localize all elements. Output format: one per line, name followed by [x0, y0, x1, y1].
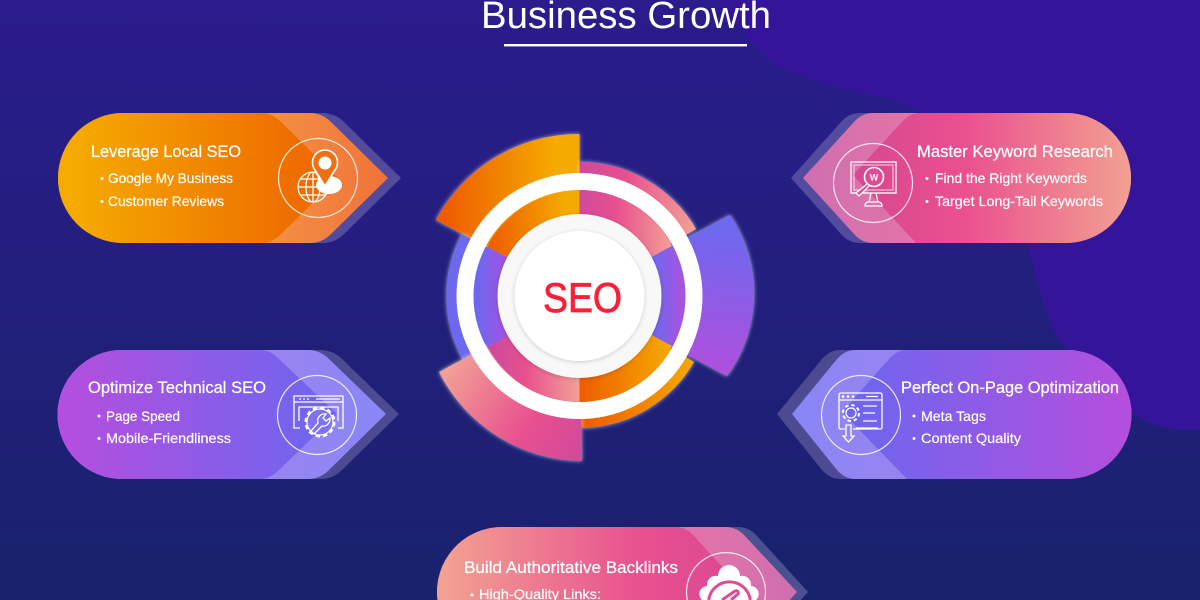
list: Page Speed	[106, 408, 180, 424]
heading: Leverage Local SEO	[91, 143, 241, 161]
inner band segments	[475, 190, 685, 402]
list	[98, 408, 231, 446]
panel: Build Authoritative Backlinks	[437, 527, 808, 600]
panel: Leverage Local SEO	[58, 113, 401, 243]
panel: Optimize Technical SEO	[57, 350, 399, 479]
icon: globe and map pin	[278, 138, 358, 218]
icon: web page with gear and download arrow	[822, 376, 900, 454]
panel: Master Keyword Research	[791, 113, 1131, 243]
icon: monitor with magnifier	[834, 144, 912, 222]
list: Content Quality	[921, 430, 1021, 446]
heading: Perfect On-Page Optimization	[901, 379, 1119, 397]
list: Target Long-Tail Keywords	[935, 193, 1103, 209]
list	[926, 170, 1103, 209]
outer thin pink sector	[580, 162, 696, 296]
outer thin purple sector	[447, 234, 580, 360]
list: Google My Business	[108, 170, 233, 186]
outer pink sector	[439, 296, 582, 461]
central SEO wheel	[436, 134, 754, 461]
list: Mobile-Friendliness	[106, 430, 231, 446]
list	[100, 170, 233, 209]
icon: monitor with magnifier: W	[870, 172, 879, 182]
heading: Build Authoritative Backlinks	[464, 559, 678, 577]
heading: Optimize Technical SEO	[88, 379, 266, 397]
heading: Master Keyword Research	[917, 143, 1113, 161]
list	[912, 408, 1021, 446]
inner light disc	[498, 214, 662, 378]
list: Find the Right Keywords	[935, 170, 1087, 186]
panel: Perfect On-Page Optimization	[777, 350, 1132, 479]
background blob	[716, 0, 1200, 430]
outer purple sector	[580, 215, 754, 376]
icon: cloud with link	[687, 553, 765, 600]
outer orange sector	[436, 134, 580, 296]
outer thin orange sector	[580, 296, 694, 428]
icon: browser with gear and wrench	[278, 376, 356, 454]
SEO label: SEO	[543, 274, 622, 321]
inner white disc	[514, 231, 644, 361]
list: Customer Reviews	[108, 193, 224, 209]
list: Meta Tags	[921, 408, 986, 424]
white ring	[465, 182, 694, 410]
